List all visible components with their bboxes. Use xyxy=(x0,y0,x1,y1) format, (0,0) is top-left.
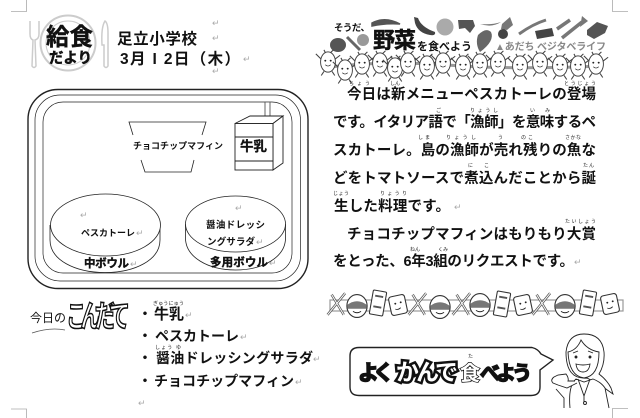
item: milk: ぎゅうにゅう xyxy=(153,300,184,307)
item: pescatore: ↵ xyxy=(240,332,248,342)
banner title: を食べよう xyxy=(417,39,472,53)
slogan: べよう xyxy=(480,363,532,385)
paragraph line 7: をとった、6年3組のリクエストです。 xyxy=(333,252,574,270)
paragraph line 3: スカトーレ。島の漁師が売れ残りの魚な xyxy=(333,141,596,159)
icon: knife xyxy=(102,21,108,68)
banner title: そうだ、 xyxy=(334,23,370,34)
heading: today's menu: 今日の xyxy=(30,310,66,325)
banner title: 野菜 xyxy=(373,28,416,53)
milk carton: 牛乳 xyxy=(240,138,268,154)
paragraph line 2: です。イタリア語で「漁師」を意味するペ xyxy=(333,114,596,131)
return marks xyxy=(212,18,251,76)
item: chocolate chip muffin: ・ xyxy=(138,373,152,389)
slogan: た xyxy=(468,354,473,360)
return marks: ↵ xyxy=(212,18,220,28)
paragraph line 5: 生した料理です。 xyxy=(334,198,450,215)
item: milk: ↵ xyxy=(185,310,193,320)
paragraph line 5 xyxy=(333,191,462,215)
bowl: pescatore: ペスカトーレ xyxy=(81,228,135,238)
paragraph line 6: チョコチップマフィンはもりもり大賞 xyxy=(347,226,596,243)
tray xyxy=(28,90,308,288)
item: chocolate chip muffin: チョコチップマフィン xyxy=(154,373,294,389)
item: milk: ・ xyxy=(138,306,152,322)
bowl: pescatore: 中ボウル xyxy=(84,256,130,270)
paragraph line 7: ↵ xyxy=(574,257,582,267)
icon: plate xyxy=(40,16,96,70)
heading: today's menu xyxy=(30,299,130,334)
paragraph line 6: たいしょう xyxy=(565,219,596,225)
bowl: soy dressing salad: 多用ボウル xyxy=(210,255,268,269)
item: soy dressing salad: 醤油ドレッシングサラダ xyxy=(156,350,313,366)
heading: today's menu: こんだて xyxy=(66,299,130,334)
band: tableware characters xyxy=(328,290,623,318)
paragraph line 4: に xyxy=(468,163,473,169)
logo subtext: だより xyxy=(49,50,92,67)
item: soy dressing salad: しょう ゆ xyxy=(155,345,181,351)
icons: vegetables xyxy=(330,16,608,52)
paragraph line 3: しま xyxy=(418,135,430,141)
bowl: pescatore xyxy=(50,194,160,272)
item: chocolate chip muffin: ↵ xyxy=(295,377,303,387)
paragraph line 7: くみ xyxy=(438,247,448,253)
hair xyxy=(566,334,613,394)
paragraph line 1: ちょう xyxy=(349,81,370,87)
paragraph line 5: りょうり xyxy=(380,191,407,197)
bowl: pescatore: ↵ xyxy=(80,210,88,220)
item: milk xyxy=(138,300,193,323)
paragraph line 6 xyxy=(347,219,596,243)
slogan: かんで xyxy=(396,359,458,385)
bowl: soy dressing salad: ↵ xyxy=(256,237,264,247)
logo text: 給食 xyxy=(46,24,93,51)
slogan: 食 xyxy=(460,362,480,385)
menu list xyxy=(138,300,321,408)
illustration: teacher xyxy=(552,334,613,408)
bowl: soy dressing salad: 醤油ドレッシ xyxy=(206,219,265,231)
paragraph line 2: い xyxy=(530,108,535,114)
slogan: よく xyxy=(358,362,394,385)
paragraph line 7 xyxy=(333,247,582,270)
bowl: soy dressing salad: ングサラダ xyxy=(207,236,255,248)
banner: let's eat vegetables xyxy=(316,16,608,84)
paragraph line 4: たん xyxy=(583,163,594,169)
body xyxy=(570,379,609,408)
item: milk: 牛乳 xyxy=(154,306,184,323)
item: pescatore: ペスカトーレ xyxy=(155,328,239,344)
cup: chocolate chip muffin: チョコチップマフィン xyxy=(133,141,223,151)
paragraph line 3: さかな xyxy=(565,134,581,141)
bowl: pescatore: ↵ xyxy=(130,259,138,269)
tray frame xyxy=(28,90,308,288)
paragraph line 1: しん xyxy=(390,81,400,87)
slogan xyxy=(358,354,532,385)
paragraph line 3 xyxy=(333,134,596,159)
paragraph line 3: のこ xyxy=(521,135,533,141)
return marks: ↵ xyxy=(212,33,220,43)
item: soy dressing salad xyxy=(138,345,321,366)
paragraph line 2: ご xyxy=(436,107,441,114)
paragraph line 2 xyxy=(333,107,596,131)
date: 3月 I 2日（木） xyxy=(120,50,240,68)
raised hand xyxy=(552,374,577,388)
paragraph line 5: ↵ xyxy=(454,202,462,212)
paragraph line 4: こ xyxy=(484,163,489,169)
paragraph line 3: りょうし xyxy=(446,135,476,141)
bowl: soy dressing salad: ↵ xyxy=(235,203,243,213)
paragraph line 2: み xyxy=(545,108,550,114)
bowl: pescatore: ↵ xyxy=(136,228,144,238)
icon: fork xyxy=(30,21,39,68)
return mark: ↵ xyxy=(138,398,146,408)
banner title: ▲あだち ベジタベライフ xyxy=(495,41,606,53)
speech bubble xyxy=(350,348,553,396)
bowl: soy dressing salad xyxy=(186,196,286,270)
logo: kyushoku dayori xyxy=(30,16,108,70)
paragraph line 5: じょう xyxy=(333,191,349,197)
paragraph line 4 xyxy=(333,163,596,187)
paragraph line 1: とうじょう xyxy=(564,81,596,87)
paragraph line 3: う xyxy=(498,135,503,141)
item: pescatore: ・ xyxy=(138,328,152,344)
paragraph line 2: りょうし xyxy=(470,108,498,114)
return marks: ↵ xyxy=(243,54,251,64)
face xyxy=(568,340,599,378)
band: vegetable characters xyxy=(316,50,608,84)
cup: chocolate chip muffin xyxy=(129,122,223,172)
article text xyxy=(333,81,596,270)
item: soy dressing salad: ・ xyxy=(138,350,152,366)
paragraph line 4: どをトマトソースで煮込んだことから誕 xyxy=(333,170,596,187)
return marks: ↵ xyxy=(212,66,220,76)
bowl: soy dressing salad: ↵ xyxy=(269,258,277,268)
school name: 足立小学校 xyxy=(117,29,197,48)
milk carton xyxy=(235,102,283,170)
item: soy dressing salad: ↵ xyxy=(313,354,321,364)
banner title xyxy=(334,23,606,53)
paragraph line 7: ねん xyxy=(410,247,420,253)
paragraph line 1: 今日は新メニューペスカトーレの登場 xyxy=(347,85,596,103)
